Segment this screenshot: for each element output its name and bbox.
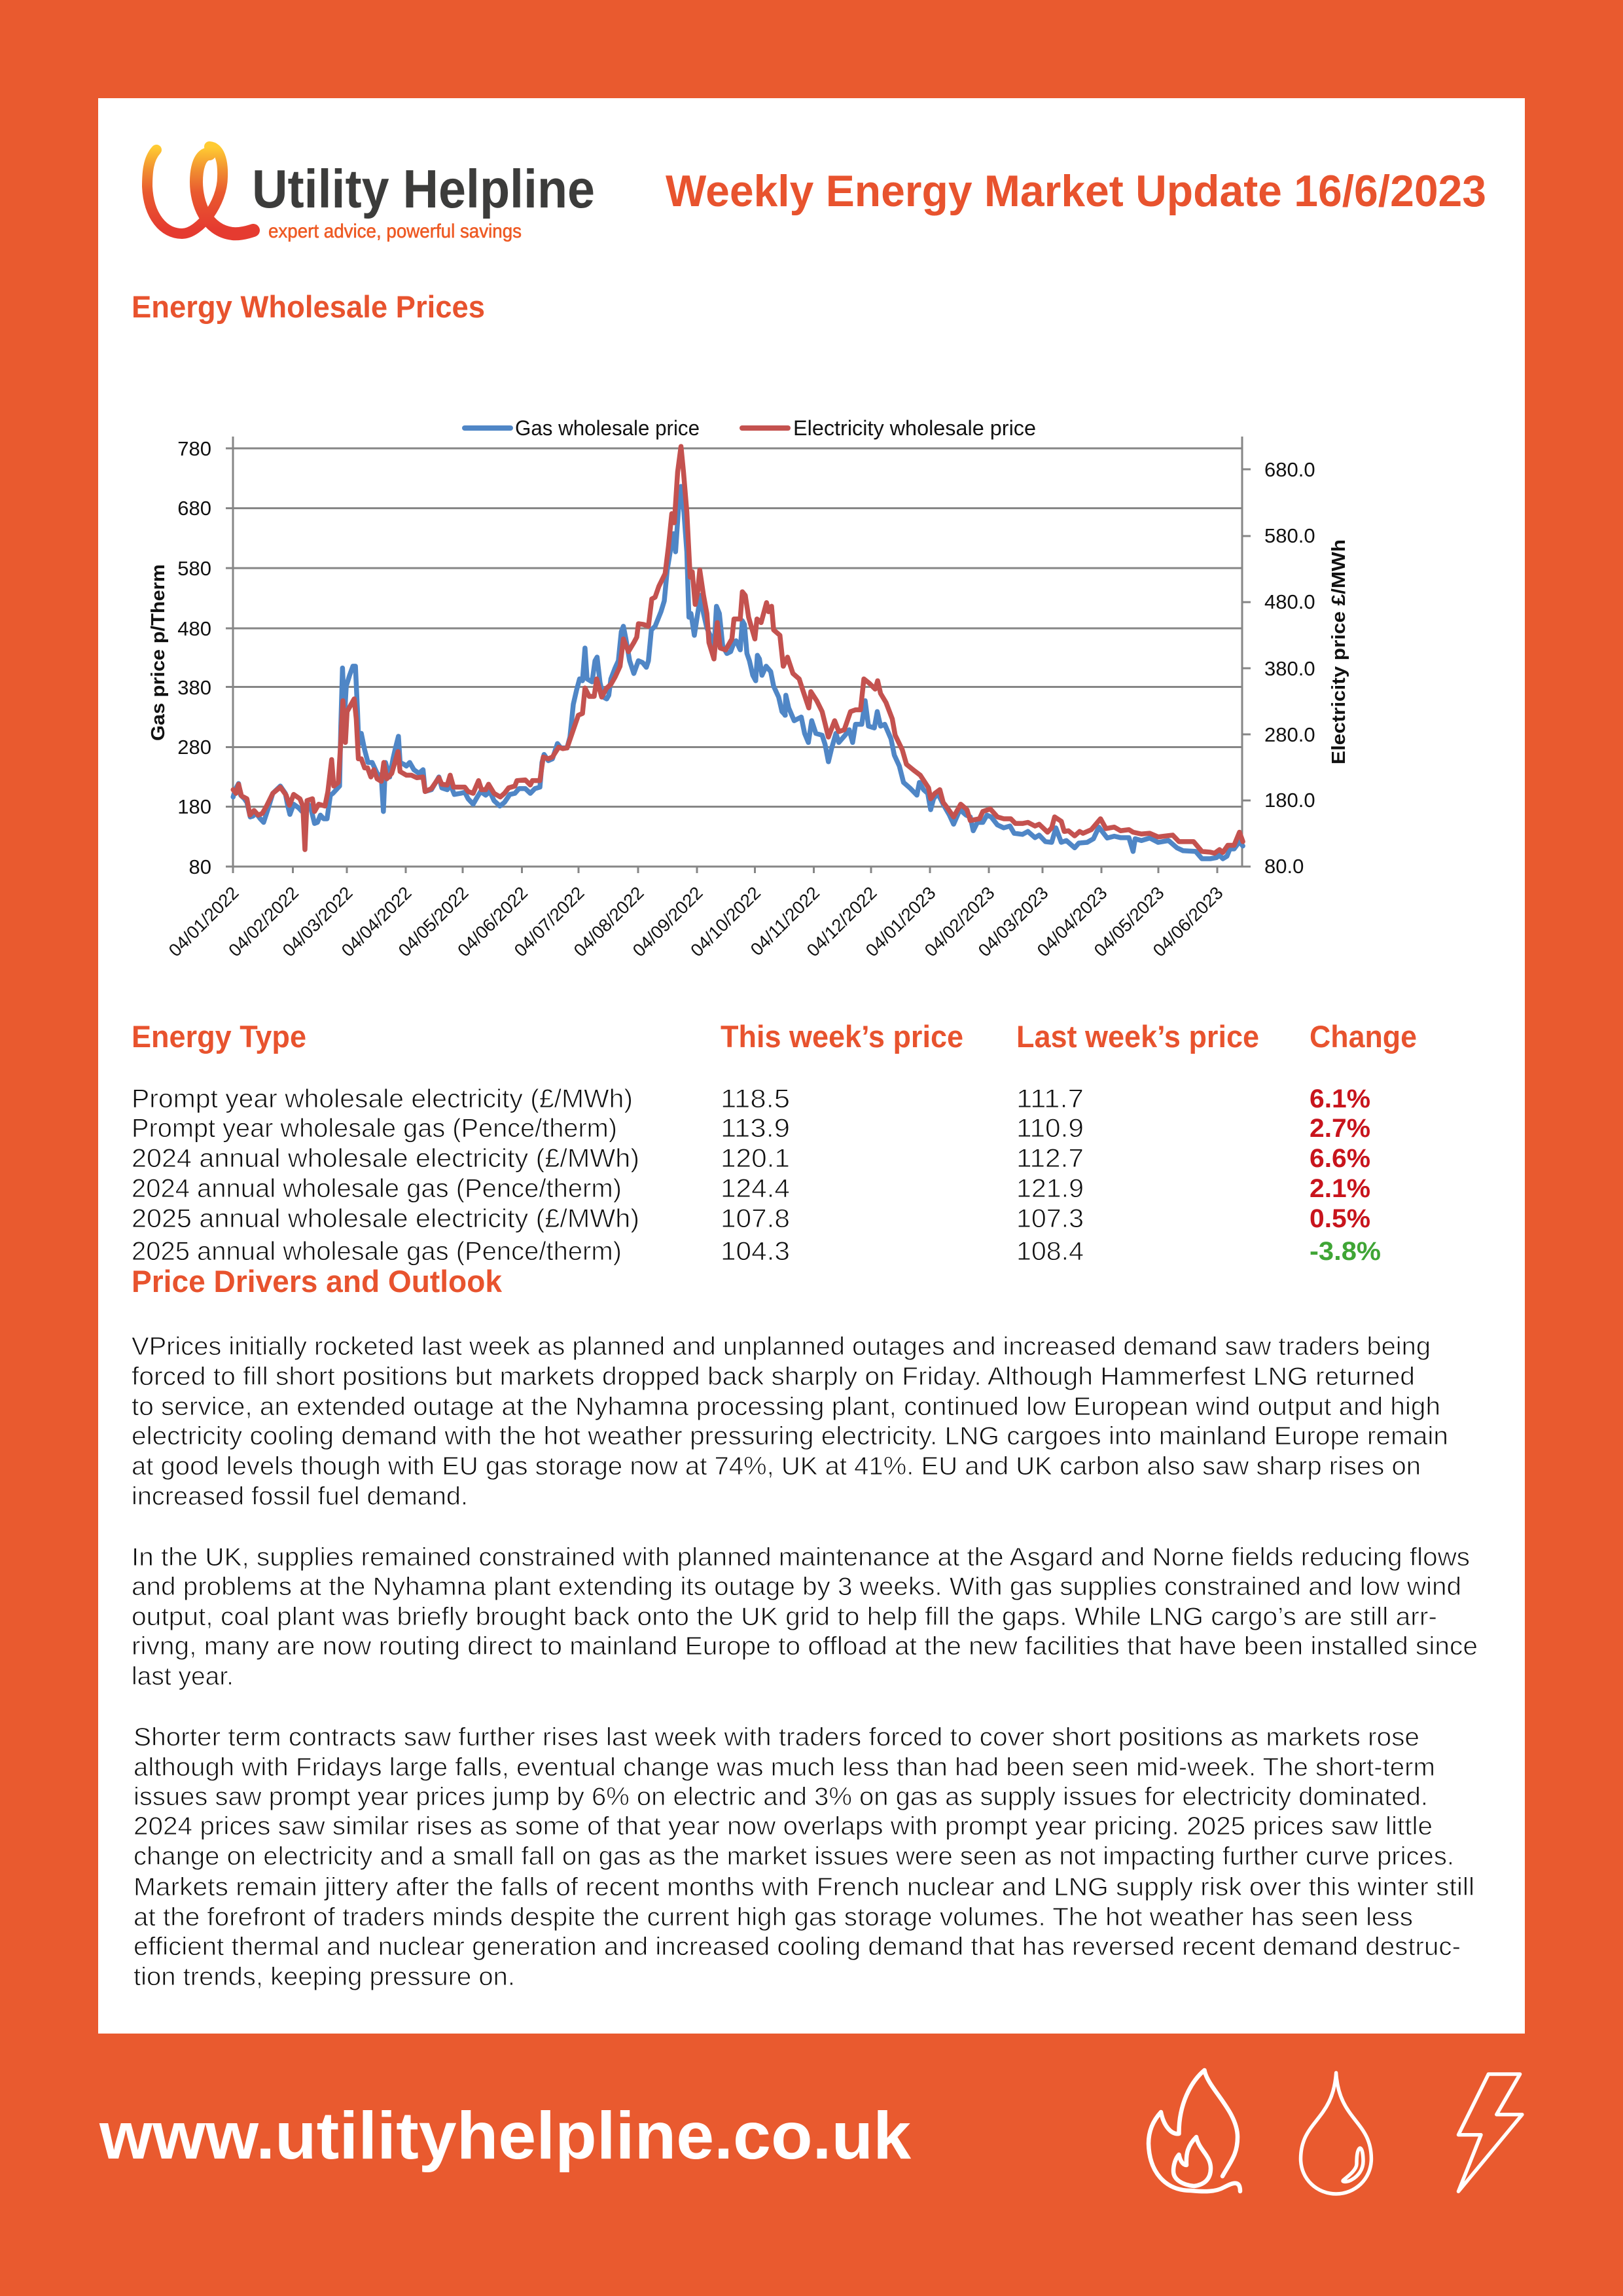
table row: prompt electricity: 111.7 — [1016, 1085, 1084, 1113]
table header row: Energy Type — [132, 1019, 306, 1054]
right axis title: Electricity price £/MWh — [1329, 539, 1349, 764]
date axis labels: 04/06/2023 — [1149, 882, 1227, 961]
text block: paragraph 3: Markets remain jittery after the falls of recent months with French nuclear and LNG supply risk over this winter still — [134, 1873, 1474, 1901]
table row: prompt gas: 110.9 — [1016, 1114, 1084, 1143]
date axis labels: 04/02/2022 — [224, 882, 302, 961]
chart line: gas wholesale price — [233, 486, 1243, 859]
table row: 2025 gas: 2025 annual wholesale gas (Pence/therm) — [132, 1237, 622, 1266]
left axis labels: 680 — [177, 497, 211, 520]
footer website address: www.utilityhelpline.co.uk — [99, 2098, 911, 2173]
legend — [465, 416, 1036, 440]
line chart: gas and electricity wholesale prices — [148, 416, 1349, 961]
table row: 2024 gas: 124.4 — [721, 1174, 790, 1203]
left axis labels: 480 — [177, 617, 211, 640]
left axis labels: 380 — [177, 676, 211, 699]
table row: 2024 gas: 2024 annual wholesale gas (Pence/therm) — [132, 1174, 622, 1203]
table row: 2024 gas: 121.9 — [1016, 1174, 1084, 1203]
text block: paragraph 1: forced to fill short positions but markets dropped back sharply on Friday. Although Hammerfest LNG returned — [132, 1363, 1415, 1391]
date axis labels: 04/01/2023 — [861, 882, 940, 961]
table row: 2025 electricity: 107.3 — [1016, 1204, 1084, 1233]
icon: water drop — [1301, 2073, 1371, 2194]
table header row: Last week’s price — [1016, 1019, 1259, 1054]
table row: prompt gas: 2.7% — [1310, 1114, 1370, 1143]
text block: paragraph 1: electricity cooling demand with the hot weather pressuring electricity. LNG cargoes into mainland Europe remain — [132, 1422, 1448, 1450]
text block: paragraph 1: at good levels though with EU gas storage now at 74%, UK at 41%. EU and UK carbon also saw sharp rises on — [132, 1452, 1421, 1480]
date axis labels: 04/04/2023 — [1033, 882, 1111, 961]
icon: flame — [1149, 2070, 1240, 2191]
text block: paragraph 1: VPrices initially rocketed last week as planned and unplanned outages and increased demand saw traders being — [132, 1333, 1431, 1361]
right axis labels: 80.0 — [1264, 855, 1304, 878]
text block: paragraph 3: at the forefront of traders minds despite the current high gas storage volumes. The hot weather has seen less — [134, 1903, 1413, 1931]
table row: 2025 electricity — [132, 1204, 1370, 1233]
table header row — [132, 1019, 1417, 1054]
text block: paragraph 3 — [134, 1723, 1474, 1991]
date axis labels: 04/08/2022 — [569, 882, 648, 961]
table: energy prices — [132, 1019, 1417, 1266]
right axis labels — [1264, 458, 1315, 878]
table row: 2024 electricity: 6.6% — [1310, 1144, 1370, 1173]
legend: Electricity wholesale price — [793, 416, 1036, 440]
table row: prompt electricity: 118.5 — [721, 1085, 790, 1113]
text block: paragraph 2: last year. — [132, 1662, 234, 1691]
text block: paragraph 3: 2024 prices saw similar rises as some of that year now overlaps with prompt year pricing. 2025 prices saw little — [134, 1812, 1433, 1840]
table row: 2024 electricity: 120.1 — [721, 1144, 790, 1173]
date axis labels: 04/04/2022 — [337, 882, 416, 961]
table row: prompt electricity: 6.1% — [1310, 1085, 1370, 1113]
right axis labels: 480.0 — [1264, 590, 1315, 613]
table row: 2025 gas — [132, 1237, 1381, 1266]
right axis labels: 280.0 — [1264, 723, 1315, 746]
left axis labels: 280 — [177, 736, 211, 759]
text block: paragraph 1: to service, an extended outage at the Nyhamna processing plant, continued low European wind output and high — [132, 1393, 1440, 1421]
date axis labels — [164, 882, 1227, 961]
date axis labels: 04/03/2022 — [278, 882, 357, 961]
table row: 2024 gas: 2.1% — [1310, 1174, 1370, 1203]
date axis labels: 04/03/2023 — [974, 882, 1052, 961]
left axis labels: 780 — [177, 437, 211, 460]
table header row: Change — [1310, 1019, 1417, 1054]
chart gridlines and axes — [226, 437, 1251, 873]
text block: paragraph 3: efficient thermal and nuclear generation and increased cooling demand that has reversed recent demand destruc- — [134, 1933, 1461, 1961]
table row: 2025 gas: -3.8% — [1310, 1237, 1381, 1266]
table row: prompt gas: Prompt year wholesale gas (Pence/therm) — [132, 1114, 617, 1143]
table row: prompt electricity — [132, 1085, 1370, 1113]
text block: paragraph 2: and problems at the Nyhamna plant extending its outage by 3 weeks. With gas supplies constrained and low wind — [132, 1573, 1461, 1601]
text block: paragraph 1: increased fossil fuel demand. — [132, 1482, 468, 1511]
left axis labels: 580 — [177, 557, 211, 580]
right axis labels: 380.0 — [1264, 657, 1315, 680]
icon: lightning bolt — [1458, 2074, 1522, 2191]
logo: Utility Helpline — [147, 147, 595, 242]
right axis labels: 680.0 — [1264, 458, 1315, 481]
text block: paragraph 3: issues saw prompt year prices jump by 6% on electric and 3% on gas as supply issues for electricity dominated. — [134, 1783, 1428, 1811]
text block: paragraph 2: rivng, many are now routing direct to mainland Europe to offload at the new facilities that have been installed since — [132, 1632, 1478, 1660]
date axis labels: 04/11/2022 — [746, 882, 823, 960]
text block: paragraph 3: although with Fridays large falls, eventual change was much less than had been seen mid-week. The short-term — [134, 1753, 1435, 1782]
text block: paragraph 1 — [132, 1333, 1448, 1511]
date axis labels: 04/06/2022 — [454, 882, 531, 961]
text block: paragraph 3: Shorter term contracts saw further rises last week with traders forced to cover short positions as markets rose — [134, 1723, 1419, 1751]
right axis labels: 580.0 — [1264, 524, 1315, 547]
table row: prompt gas: 113.9 — [721, 1114, 790, 1143]
icon: logo mark — [147, 147, 253, 234]
text block: paragraph 2: In the UK, supplies remained constrained with planned maintenance at the Asgard and Norne fields reducing flows — [132, 1543, 1470, 1571]
table row: 2024 gas — [132, 1174, 1370, 1203]
left axis labels — [177, 437, 211, 878]
date axis labels: 04/05/2022 — [394, 882, 473, 961]
text block: paragraph 3: change on electricity and a small fall on gas as the market issues were seen as not impacting further curve prices. — [134, 1842, 1454, 1871]
date axis labels: 04/12/2022 — [802, 882, 881, 961]
table row: 2025 gas: 108.4 — [1016, 1237, 1084, 1266]
chart line: electricity wholesale price — [233, 446, 1243, 853]
left axis labels: 180 — [177, 795, 211, 818]
left axis title: Gas price p/Therm — [148, 564, 169, 741]
heading: Energy Wholesale Prices: Energy Wholesale Prices — [132, 289, 485, 324]
table row: 2025 electricity: 107.8 — [721, 1204, 790, 1233]
table header row: This week’s price — [721, 1019, 963, 1054]
logo tagline: expert advice, powerful savings — [268, 221, 522, 242]
legend: Gas wholesale price — [515, 416, 700, 440]
table row: 2025 electricity: 0.5% — [1310, 1204, 1370, 1233]
table row: 2025 gas: 104.3 — [721, 1237, 790, 1266]
logo wordmark: Utility Helpline — [252, 158, 595, 219]
panel: white content sheet — [98, 98, 1525, 2034]
table row: prompt electricity: Prompt year wholesale electricity (£/MWh) — [132, 1085, 633, 1113]
right axis labels: 180.0 — [1264, 789, 1315, 812]
table row: prompt gas — [132, 1114, 1370, 1143]
text block: paragraph 3: tion trends, keeping pressure on. — [134, 1963, 515, 1991]
date axis labels: 04/07/2022 — [510, 882, 588, 961]
left axis labels: 80 — [189, 855, 211, 878]
table row: 2024 electricity: 2024 annual wholesale electricity (£/MWh) — [132, 1144, 639, 1173]
table row: 2025 electricity: 2025 annual wholesale electricity (£/MWh) — [132, 1204, 639, 1233]
table row: 2024 electricity: 112.7 — [1016, 1144, 1084, 1173]
text block: paragraph 2 — [132, 1543, 1478, 1691]
date axis labels: 04/10/2022 — [687, 882, 764, 961]
text block: paragraph 2: output, coal plant was briefly brought back onto the UK grid to help fill the gaps. While LNG cargo’s are still arr- — [132, 1603, 1437, 1631]
date axis labels: 04/09/2022 — [628, 882, 707, 961]
title: Weekly Energy Market Update 16/6/2023 — [666, 166, 1486, 216]
table row: 2024 electricity — [132, 1144, 1370, 1173]
date axis labels: 04/05/2023 — [1090, 882, 1168, 961]
heading: Price Drivers and Outlook: Price Drivers and Outlook — [132, 1264, 503, 1299]
date axis labels: 04/01/2022 — [164, 882, 243, 961]
date axis labels: 04/02/2023 — [920, 882, 999, 961]
